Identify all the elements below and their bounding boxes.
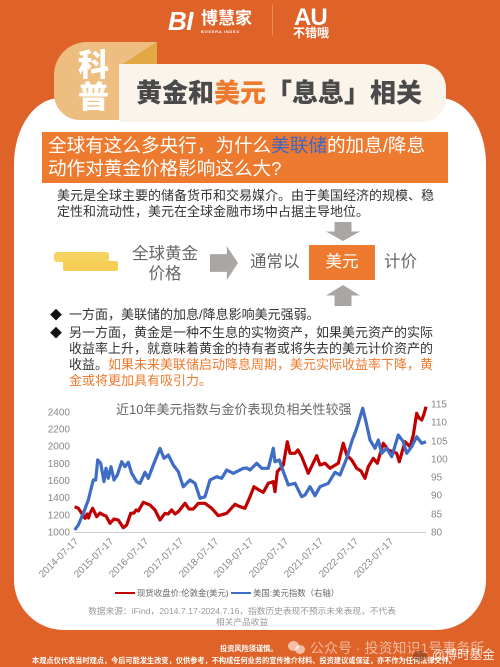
left axis: 1600	[48, 476, 70, 487]
left axis: 1400	[48, 493, 70, 504]
question box	[42, 132, 448, 183]
icon: gold bars	[54, 252, 118, 271]
label: global gold price: 全球黄金	[132, 245, 198, 263]
bullet two: 另一方面，黄金是一种不生息的实物资产，如果美元资产的实际	[69, 325, 433, 340]
legend: 美国:美元指数（右轴）	[253, 588, 339, 598]
left axis: 2200	[48, 424, 70, 436]
bullet one: ◆	[50, 308, 62, 322]
x axis labels	[37, 536, 396, 580]
left axis	[48, 408, 70, 538]
bullet two: 收益率上升，就意味着黄金的持有者或将失去的美元计价资产的	[69, 341, 433, 356]
title banner: 黄金和美元「息息」相关	[136, 78, 422, 108]
right axis: 110	[431, 418, 447, 428]
badge: 科普	[54, 42, 157, 120]
x axis labels: 2022-07-17	[317, 536, 361, 580]
x axis labels: 2020-07-17	[247, 536, 291, 580]
intro text	[57, 188, 434, 219]
x axis labels: 2019-07-17	[212, 536, 256, 580]
logo: Bosera Index: 博慧家	[201, 9, 252, 28]
left axis: 2000	[48, 442, 70, 452]
series: gold price	[75, 407, 426, 528]
arrow: down	[326, 222, 360, 241]
badge: 科普: 普	[78, 80, 109, 115]
bullet two	[50, 325, 433, 388]
x axis labels: 2021-07-17	[282, 536, 326, 580]
label: global gold price	[132, 244, 198, 283]
series: dollar index	[75, 408, 426, 530]
right axis: 90	[431, 490, 443, 502]
box: US dollar: 美元	[326, 253, 358, 271]
logo: AU: 不错哦	[293, 26, 329, 40]
chart: gold vs dollar index	[37, 400, 448, 580]
logo: AU: AU	[294, 4, 327, 31]
label: usually in: 通常以	[250, 253, 300, 271]
right axis: 105	[431, 436, 448, 448]
bullet list	[50, 307, 433, 388]
x axis labels: 2023-07-17	[352, 536, 396, 580]
left axis: 1000	[48, 528, 70, 538]
legend	[115, 588, 339, 598]
logo: AU	[293, 4, 329, 40]
question box: 动作对黄金价格影响这么大?	[48, 158, 281, 179]
watermark: weibo: @博时基金	[432, 648, 495, 662]
data source note: 相关产品收益	[216, 616, 268, 626]
arrow: up	[326, 285, 360, 306]
arrow: right	[210, 246, 238, 280]
diagram: gold priced in dollars	[54, 222, 417, 306]
box: US dollar	[309, 245, 375, 280]
watermark: wechat account: 公众号 · 投资知识1号事务所	[310, 640, 484, 656]
logo: Bosera Index: BOSERA INDEX	[201, 29, 240, 34]
question box: 全球有这么多央行，为什么美联储的加息/降息	[48, 135, 425, 156]
white content panel	[14, 98, 486, 630]
title banner	[119, 64, 446, 122]
intro text: 美元是全球主要的储备货币和交易媒介。由于美国经济的规模、稳	[57, 188, 434, 203]
x axis labels: 2015-07-17	[72, 536, 116, 580]
right axis: 85	[431, 510, 443, 520]
right axis: 80	[431, 528, 443, 538]
legend: 现货收盘价:伦敦金(美元)	[137, 588, 229, 598]
intro text: 定性和流动性，美元在全球金融市场中占据主导地位。	[57, 204, 369, 219]
right axis: 100	[431, 454, 448, 466]
logo: Bosera Index	[168, 6, 252, 36]
right axis: 115	[431, 400, 447, 410]
logo: Bosera Index: BI	[168, 6, 193, 36]
footer disclaimer: 本观点仅代表当时观点，今后可能发生改变，仅供参考，不构成任何业务的宣传推介材料、投资建议或保证，亦不作为任何法律文件。	[32, 656, 456, 665]
bullet one: 一方面，美联储的加息/降息影响美元强弱。	[69, 307, 320, 322]
x axis labels: 2014-07-17	[37, 536, 81, 580]
right axis: 95	[431, 472, 443, 484]
chart title: 近10年美元指数与金价表现负相关性较强	[116, 402, 351, 417]
footer disclaimer	[32, 644, 456, 665]
data source note: 数据来源：iFind，2014.7.17-2024.7.16，指数历史表现不预示未来表现，不代表	[88, 606, 396, 616]
left axis: 2400	[48, 408, 70, 418]
x axis labels: 2016-07-17	[107, 536, 151, 580]
bullet two: ◆	[50, 326, 62, 340]
x axis labels: 2018-07-17	[177, 536, 221, 580]
badge: 科普: 科	[78, 48, 109, 83]
data source note	[88, 606, 396, 626]
bullet two: 金或将更加具有吸引力。	[69, 373, 212, 388]
x axis labels: 2017-07-17	[142, 536, 186, 580]
right axis	[431, 400, 448, 538]
left axis: 1800	[48, 459, 70, 470]
bullet two: 收益。如果未来美联储启动降息周期，美元实际收益率下降，黄	[69, 357, 433, 372]
label: global gold price: 价格	[148, 265, 182, 283]
label: priced: 计价	[384, 253, 417, 271]
left axis: 1200	[48, 510, 70, 522]
footer disclaimer: 投资风险须谨慎。	[220, 644, 278, 653]
